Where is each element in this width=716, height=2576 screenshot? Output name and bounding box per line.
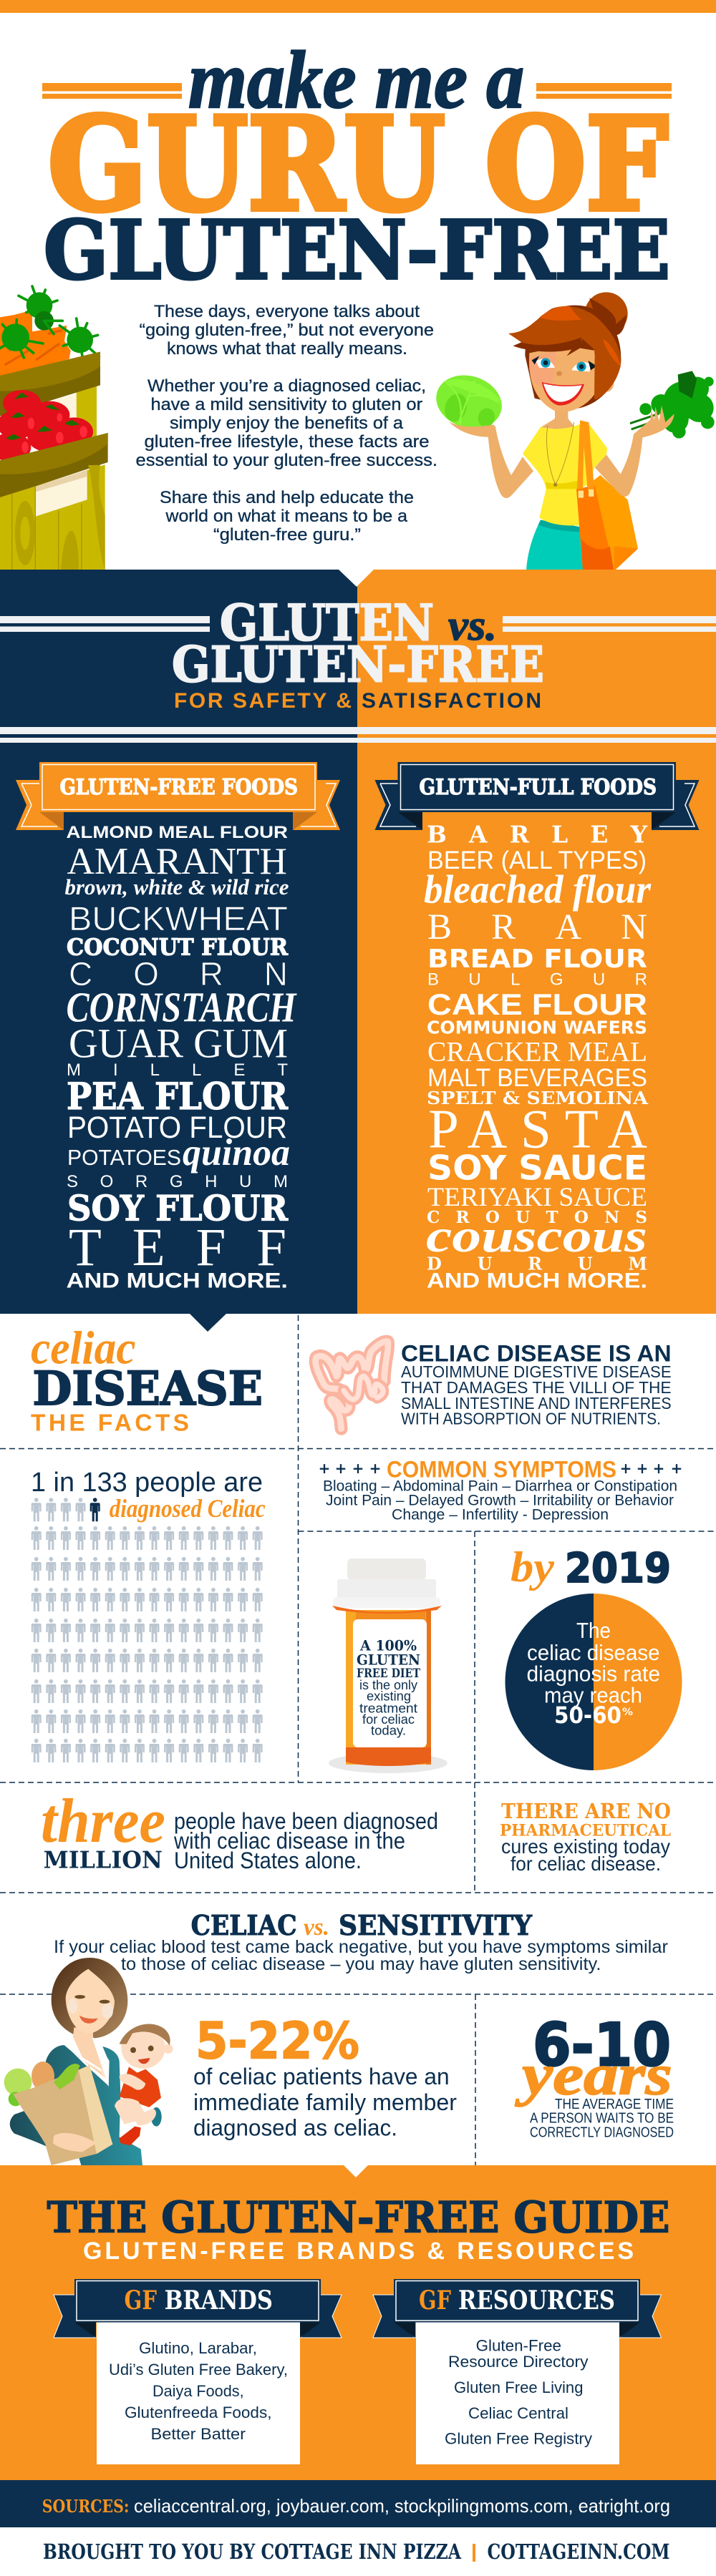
tomatoes [0,390,93,462]
neck [541,409,575,430]
down arrow [190,1314,226,1332]
cabbage hand [449,421,496,437]
ear [601,371,614,391]
cabbage [429,367,509,436]
hair front [508,306,621,399]
stat: 5-22%: 5-22% [195,2012,359,2071]
subheading left: FOR SAFETY & [174,689,352,713]
list: gluten-free foods: TEFF [69,1218,286,1277]
shopping bag [587,475,638,570]
ribbon: gluten-free foods [16,762,340,830]
list: gluten-free foods: AMARANTH [67,841,287,882]
illustration: produce crate [0,286,108,570]
stat: three million: three [41,1787,165,1856]
footer credit: BROUGHT TO YOU BY COTTAGE INN PIZZA [43,2540,461,2564]
title stripes right [536,83,672,99]
hair back and bun [585,292,628,335]
stat: by 2019: 2019 [565,1545,671,1592]
illustration: woman with groceries [429,292,715,570]
arms [488,426,533,498]
panel: gf brands: Glutenfreeda Foods, [125,2404,272,2421]
face [66,1969,115,2034]
common symptoms: + [620,1460,632,1477]
stat: three million: MILLION [44,1846,163,1874]
list: gluten-free foods: CORN [69,955,288,992]
list: gluten-free foods: brown, white & wild rice [64,874,289,899]
title stripes left [42,83,182,99]
panel: gf brands [54,2279,342,2464]
make me a: make me a [188,34,524,125]
sources bar: SOURCES: [42,2496,130,2517]
intro text: knows what that really means. [167,339,407,358]
parsley [630,414,659,429]
common symptoms: + [319,1460,330,1477]
definition text: SMALL INTESTINE AND INTERFERES [401,1394,672,1413]
list: gluten-full foods: CROUTONS [427,1208,647,1227]
pill bottle [329,1558,448,1773]
paper bag [13,2065,112,2165]
panel: gf resources: Gluten-Free [476,2337,561,2355]
list: gluten-free foods: BUCKWHEAT [69,899,288,937]
stat: three million: United States alone. [174,1848,362,1873]
list: gluten-free foods: SORGHUM [67,1172,288,1191]
celiac vs sensitivity [54,1909,668,1974]
skirt [526,520,585,570]
intro text: world on what it means to be a [165,507,408,526]
intro text: Share this and help educate the [160,488,414,507]
list: gluten-full foods: couscous [426,1210,647,1262]
common symptoms: Change – Infertility - Depression [392,1506,609,1523]
panel: gf resources: Celiac Central [468,2404,569,2422]
jacket [10,2045,142,2165]
hair [52,1958,127,2038]
list: gluten-full foods: DURUM [427,1254,647,1274]
list: gluten-full foods: BRAN [427,907,647,947]
common symptoms: + [369,1460,381,1477]
face [529,346,596,412]
definition text: WITH ABSORPTION OF NUTRIENTS. [401,1410,661,1428]
intro text: “gluten-free guru.” [213,525,361,545]
baby limbs [115,2098,156,2126]
stat: 5-22%: diagnosed as celiac. [193,2115,397,2141]
stat: by 2019: % [622,1707,633,1718]
illustration: mother with baby [4,1958,173,2165]
common symptoms: + [335,1460,347,1477]
celiac disease heading: celiac [31,1322,136,1374]
list: gluten-full foods: CRACKER MEAL [427,1037,647,1068]
definition text [401,1341,672,1428]
celiac disease heading [31,1322,263,1436]
stat: 5-22% [193,2012,457,2141]
panel: gf resources: RESOURCES [458,2285,615,2316]
panel: gf brands: Udi’s Gluten Free Bakery, [109,2361,288,2379]
celiac vs sensitivity: vs. [304,1914,329,1941]
stat: by 2019: may reach [544,1683,642,1707]
stat: no pharmaceutical cures: PHARMACEUTICAL [500,1822,671,1840]
stat: no pharmaceutical cures: for celiac disease. [511,1853,661,1875]
half chart [505,1594,594,1770]
list: gluten-free foods: ALMOND MEAL FLOUR [66,823,288,842]
heading vs: vs. [448,602,497,649]
panel: gf resources: Gluten Free Registry [445,2430,592,2448]
lower shelf [0,433,108,498]
stat: three million: with celiac disease in the [173,1828,405,1854]
pill bottle: existing [367,1689,411,1704]
people pictogram [32,1498,263,1762]
baby foot [122,2121,137,2131]
icon: intestine [316,1342,388,1429]
list: gluten-full foods: TERIYAKI SAUCE [427,1183,647,1212]
definition text: CELIAC DISEASE IS AN [401,1341,672,1367]
lower crate [0,464,105,570]
list: gluten-full foods: CAKE FLOUR [427,987,647,1021]
stat: 5-22%: immediate family member [193,2089,457,2115]
section: gluten vs gluten-free [0,570,716,1314]
ribbon: gluten-full foods [375,762,699,830]
stat: by 2019 [505,1543,682,1770]
panel: gf resources: Resource Directory [448,2353,589,2371]
celiac vs sensitivity: to those of celiac disease – you may have gluten sensitivity. [121,1954,601,1974]
panel: gluten-free guide [0,2165,716,2480]
cap [347,1558,426,1580]
stat: 6-10 years: A PERSON WAITS TO BE [530,2111,674,2127]
orange half [357,570,716,1314]
panel: gf brands: Glutino, Larabar, [139,2339,257,2357]
bottle label [353,1619,427,1747]
list: gluten-full foods: PASTA [428,1098,647,1160]
upper shelf [0,352,100,416]
common symptoms: Joint Pain – Delayed Growth – Irritability or Behavior [326,1493,674,1508]
list: gluten-full foods [424,820,652,1292]
stripes [0,616,716,743]
stat: 5-22%: of celiac patients have an [193,2064,450,2089]
produce [4,2069,32,2096]
resources list box [416,2322,619,2464]
dashed grid [0,1315,716,2165]
shirt [523,424,607,526]
intro text: Whether you’re a diagnosed celiac, [147,376,426,396]
footer credit: COTTAGEINN.COM [487,2540,670,2564]
bag front and strap [576,485,614,570]
ribbon text: GLUTEN-FREE FOODS [60,775,298,800]
carrots [0,310,71,377]
carrot greens [0,286,99,365]
notch [344,2165,368,2177]
stat: 6-10 years: years [514,2042,672,2107]
stat: 1 in 133: diagnosed Celiac [110,1494,266,1523]
guide subheading: GLUTEN-FREE BRANDS & RESOURCES [83,2238,634,2265]
stat: 6-10 years: 6-10 [533,2011,671,2079]
stat: by 2019: diagnosis rate [527,1661,660,1686]
notch [339,570,374,587]
intro text: simply enjoy the benefits of a [170,414,404,433]
brands list box [97,2322,300,2464]
panel: gf resources: GF [419,2285,451,2316]
stat: 1 in 133 [31,1468,266,1762]
navy half [0,570,357,1314]
pill bottle: today. [371,1724,406,1738]
title [42,34,672,298]
stat: no pharmaceutical cures [500,1799,671,1875]
stat: no pharmaceutical cures: cures existing today [501,1835,670,1858]
crate back post [77,379,97,436]
panel: gf brands: BRANDS [165,2285,273,2316]
stat: three million: people have been diagnosed [174,1808,438,1834]
list: gluten-full foods: bleached flour [424,868,652,912]
intro text [136,302,437,545]
definition text: AUTOIMMUNE DIGESTIVE DISEASE [401,1362,672,1381]
celiac disease heading: DISEASE [33,1362,263,1416]
stat: three million [41,1787,438,1874]
list: gluten-free foods: SOY FLOUR [67,1188,289,1229]
stat: no pharmaceutical cures: THERE ARE NO [501,1799,671,1823]
common symptoms [319,1457,682,1523]
intro text: These days, everyone talks about [154,302,420,321]
common symptoms: + [653,1460,664,1477]
gluten-free: GLUTEN-FREE [44,204,670,298]
celiac vs sensitivity: CELIAC [191,1909,297,1941]
common symptoms: + [671,1460,682,1477]
baby body [151,2107,162,2127]
list: gluten-full foods: MALT BEVERAGES [427,1064,647,1092]
bottle body [346,1610,431,1765]
list: gluten-free foods: PEA FLOUR [67,1075,289,1118]
list: gluten-full foods: SPELT & SEMOLINA [427,1088,648,1108]
stat: 6-10 years [514,2011,674,2141]
list: gluten-free foods: CORNSTARCH [66,983,297,1030]
common symptoms: + [352,1460,364,1477]
smile [542,382,584,406]
intro text: “going gluten-free,” but not everyone [139,321,434,340]
pill bottle: treatment [359,1701,417,1715]
subheading right: SATISFACTION [362,689,541,713]
panel: gf brands: Better Batter [150,2425,246,2443]
ribbon text: GLUTEN-FULL FOODS [420,775,657,800]
guide heading: THE GLUTEN-FREE GUIDE [47,2192,670,2243]
necklace [546,422,574,484]
common symptoms: Bloating – Abdominal Pain – Diarrhea or Constipation [323,1478,677,1495]
common symptoms: + [637,1460,648,1477]
list: gluten-free foods: AND MUCH MORE. [66,1269,288,1292]
stat: 6-10 years: CORRECTLY DIAGNOSED [530,2125,674,2141]
stat: 6-10 years: THE AVERAGE TIME [555,2097,674,2112]
arm hand [53,2133,97,2152]
celiac disease heading: THE FACTS [31,1410,189,1436]
panel: gf resources [373,2279,662,2464]
pill bottle: A 100% [359,1637,417,1654]
stat: by 2019: by [511,1543,554,1591]
list: gluten-full foods: BARLEY [427,820,647,849]
pill bottle: FREE DIET [357,1667,421,1680]
list: gluten-full foods: BEER (ALL TYPES) [427,847,647,874]
intro text: essential to your gluten-free success. [136,451,437,470]
celiac vs sensitivity: If your celiac blood test came back negative, but you have symptoms similar [54,1937,668,1957]
heading gluten: GLUTEN [220,594,434,653]
stat: by 2019: The [576,1618,611,1643]
list: gluten-free foods: quinoa [183,1132,290,1174]
eyes [536,359,555,368]
celiac vs sensitivity: SENSITIVITY [339,1909,533,1941]
stat: 1 in 133: 1 in 133 people are [31,1468,263,1498]
list: gluten-full foods: BULGUR [427,970,647,989]
list: gluten-free foods: MILLET [67,1060,288,1080]
panel: gf resources: Gluten Free Living [454,2379,583,2396]
parsley hand [634,406,674,438]
intro text: have a mild sensitivity to gluten or [150,395,422,414]
list: gluten-free foods: POTATO FLOUR [67,1111,287,1145]
definition text: THAT DAMAGES THE VILLI OF THE [401,1378,672,1397]
list: gluten-free foods: GUAR GUM [69,1020,288,1067]
list: gluten-full foods: AND MUCH MORE. [427,1269,647,1292]
sources bar: celiaccentral.org, joybauer.com, stockpilingmoms.com, eatright.org [134,2495,670,2517]
crate label [36,470,87,517]
sources bar [0,2480,716,2527]
guru of: GURU OF [48,89,668,239]
stat: by 2019: celiac disease [527,1640,660,1665]
list: gluten-full foods: SOY SAUCE [427,1149,647,1188]
collar [64,2036,109,2087]
heading gluten-free: GLUTEN-FREE [172,637,544,694]
stat: by 2019: 50-60 [554,1702,621,1729]
top bar [0,0,716,13]
pill bottle: for celiac [362,1712,415,1727]
list: gluten-full foods: BREAD FLOUR [427,945,647,974]
panel: gf brands: Daiya Foods, [153,2382,244,2400]
list: gluten-full foods: COMMUNION WAFERS [427,1017,647,1038]
list: gluten-free foods: COCONUT FLOUR [67,934,288,961]
pill bottle: GLUTEN [357,1652,420,1669]
common symptoms: COMMON SYMPTOMS [387,1457,616,1483]
intro text: gluten-free lifestyle, these facts are [145,432,430,452]
panel: gf brands: GF [125,2285,157,2316]
baby head [121,2026,165,2069]
list: gluten-free foods [64,823,297,1292]
pill bottle: is the only [359,1678,417,1692]
list: gluten-free foods: POTATOES [67,1145,181,1170]
neck [73,2027,107,2080]
